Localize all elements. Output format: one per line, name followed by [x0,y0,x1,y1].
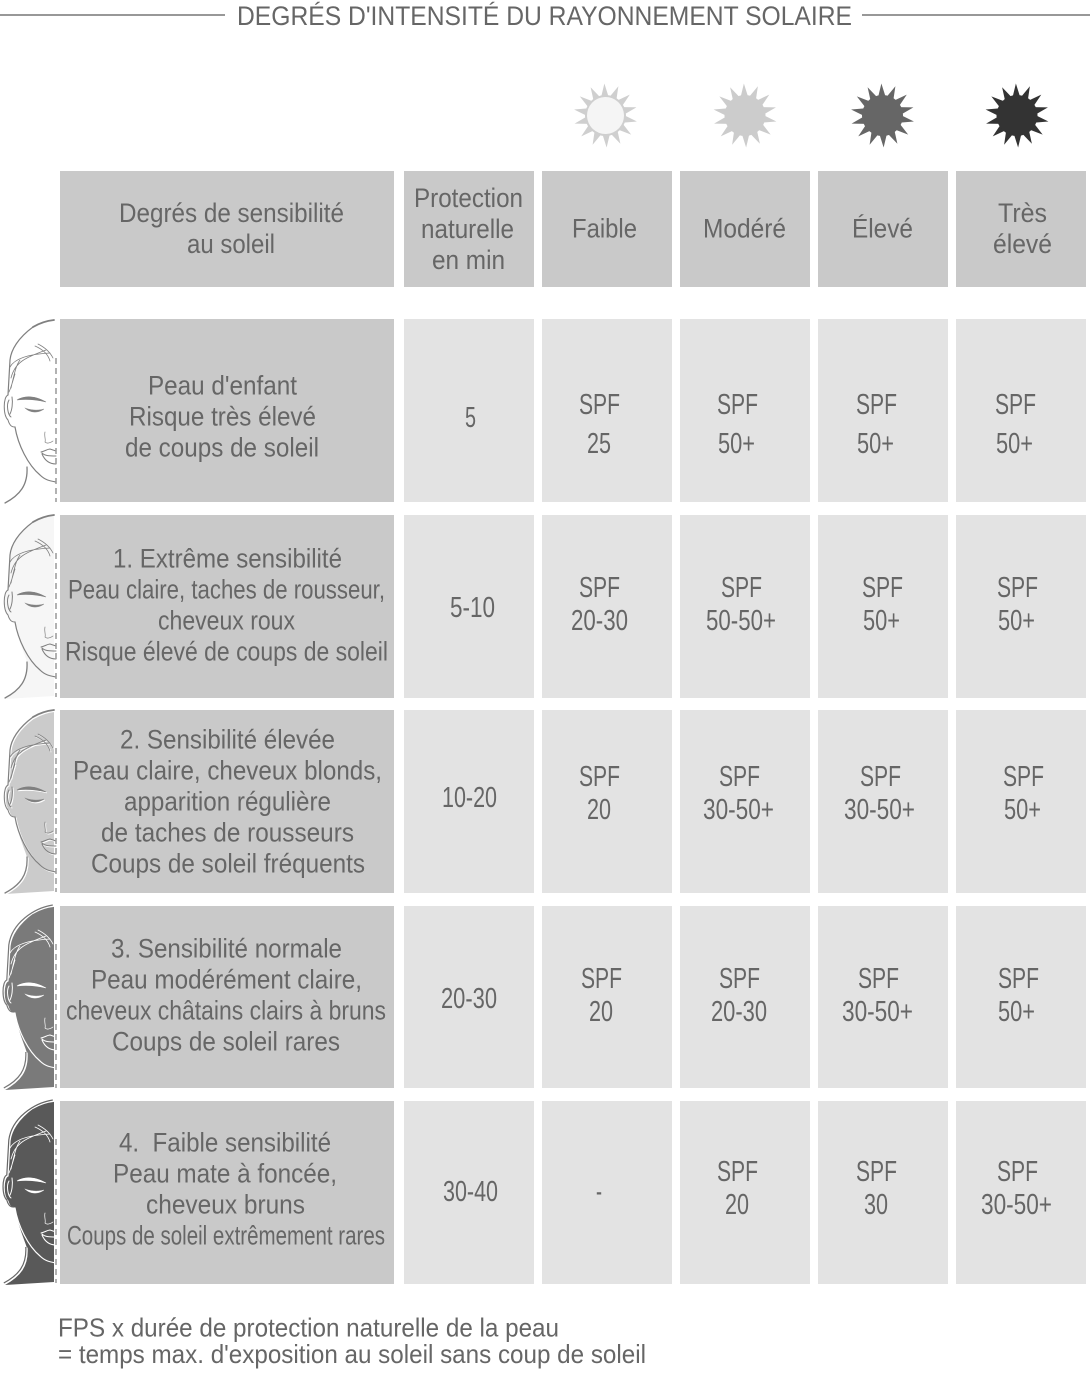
SPF low: none: - [596,1176,602,1208]
skin description: Risque élevé de coups de soleil [65,636,388,666]
SPF moderate: SPF [721,572,762,604]
header: very high: élevé [993,229,1052,259]
SPF very high: SPF [1003,761,1044,793]
table header [60,171,1086,287]
title: DEGRÉS D'INTENSITÉ DU RAYONNEMENT SOLAIRE [237,1,852,31]
header: natural protection: en min [432,245,505,275]
skin description: 1. Extrême sensibilité [113,544,342,574]
SPF low: SPF [581,963,622,995]
SPF moderate [703,761,774,826]
SPF moderate: 50-50+ [706,605,776,637]
header: very high: Très [998,198,1047,228]
SPF high [862,572,903,637]
skin description: Peau claire, cheveux blonds, [73,756,382,786]
icon: face, light [4,710,57,894]
SPF very high: 50+ [998,996,1035,1028]
icon: sun, very high intensity [985,82,1049,149]
skin description: Coups de soleil rares [112,1026,340,1056]
SPF very high: SPF [995,389,1036,421]
skin description [65,544,388,666]
header: sensitivity [119,198,344,259]
SPF low: SPF [579,572,620,604]
SPF moderate: SPF [717,389,758,421]
SPF low: 20 [589,996,613,1028]
SPF very high [1003,761,1044,826]
SPF very high [997,572,1038,637]
icon: sun, low intensity [573,82,638,149]
SPF moderate: 20-30 [711,996,767,1028]
SPF low: 25 [587,428,611,460]
SPF very high: 50+ [1004,794,1041,826]
header: natural protection: Protection [414,183,523,213]
SPF high [842,963,913,1028]
header: very high [993,198,1052,259]
skin description: apparition régulière [124,786,331,816]
skin description: cheveux roux [158,606,295,636]
skin description: Coups de soleil fréquents [91,848,365,878]
row: child skin [4,319,1086,504]
natural protection value: 5 [465,402,476,434]
SPF high: SPF [856,1156,897,1188]
SPF very high [995,389,1036,460]
header: moderate: Modéré [703,214,786,244]
row: high sensitivity [4,710,1086,894]
SPF low: 20 [587,794,611,826]
header: sensitivity: Degrés de sensibilité [119,198,344,228]
footer note: = temps max. d'exposition au soleil sans coup de soleil [58,1339,646,1369]
skin description: Peau modérément claire, [91,964,362,994]
SPF moderate: SPF [717,1156,758,1188]
SPF low: 20-30 [571,605,628,637]
SPF high: 30-50+ [844,794,915,826]
SPF moderate: 20 [725,1189,749,1221]
SPF very high [981,1156,1052,1221]
icon: sun, moderate intensity [713,82,777,149]
icon: face, dark [3,1100,56,1285]
SPF moderate: 50+ [718,428,755,460]
SPF very high: SPF [997,1156,1038,1188]
SPF low [579,389,620,460]
SPF very high: SPF [998,963,1039,995]
SPF high [856,1156,897,1221]
SPF very high: 30-50+ [981,1189,1052,1221]
row: extreme sensitivity [4,515,1086,699]
skin description: Peau claire, taches de rousseur, [68,574,385,604]
SPF high: SPF [862,572,903,604]
skin description [66,934,386,1056]
SPF high [844,761,915,826]
skin description [125,370,319,462]
SPF very high: 50+ [996,428,1033,460]
row: low sensitivity [3,1100,1086,1285]
header: low: Faible [572,214,637,244]
SPF very high: 50+ [998,605,1035,637]
footer note: FPS x durée de protection naturelle de la peau [58,1312,559,1342]
skin description: cheveux bruns [146,1190,305,1220]
icon: face, medium [3,905,56,1090]
SPF moderate: 30-50+ [703,794,774,826]
skin description: Peau mate à foncée, [113,1158,337,1188]
skin description: Risque très élevé [129,402,316,432]
SPF high: 50+ [857,428,894,460]
SPF moderate: SPF [719,963,760,995]
icon: face, very pale [4,515,56,699]
SPF high [856,389,897,460]
row: normal sensitivity [3,905,1086,1090]
header: natural protection [414,183,523,275]
skin description: 3. Sensibilité normale [111,934,342,964]
skin description: de taches de rousseurs [101,818,354,848]
header: sensitivity: au soleil [187,229,275,259]
natural protection value: 10-20 [442,782,497,814]
SPF moderate: SPF [719,761,760,793]
SPF high: SPF [860,761,901,793]
natural protection value: 20-30 [441,983,497,1015]
header: natural protection: naturelle [421,214,514,244]
SPF high: 30-50+ [842,996,913,1028]
skin description: 4. Faible sensibilité [119,1128,331,1158]
skin description: Peau d'enfant [148,370,297,400]
SPF high: 30 [864,1189,888,1221]
icon: face, child skin [4,320,56,504]
skin description: de coups de soleil [125,432,319,462]
SPF low [581,963,622,1028]
skin description [67,1128,385,1250]
natural protection value: 5-10 [450,592,495,624]
skin description: cheveux châtains clairs à bruns [66,996,386,1026]
SPF very high [998,963,1039,1028]
skin description: 2. Sensibilité élevée [120,724,335,754]
footer note [58,1312,646,1369]
SPF very high: SPF [997,572,1038,604]
SPF low [579,761,620,826]
SPF moderate [717,389,758,460]
header: high: Élevé [852,214,913,244]
SPF high: SPF [856,389,897,421]
SPF low [571,572,628,637]
skin description [73,724,382,878]
icon: sun, high intensity [850,82,915,149]
SPF low: SPF [579,389,620,421]
skin description: Coups de soleil extrêmement rares [67,1220,385,1250]
SPF moderate [706,572,776,637]
SPF moderate [717,1156,758,1221]
SPF low: SPF [579,761,620,793]
SPF high: 50+ [863,605,900,637]
SPF moderate [711,963,767,1028]
natural protection value: 30-40 [443,1176,498,1208]
SPF high: SPF [858,963,899,995]
